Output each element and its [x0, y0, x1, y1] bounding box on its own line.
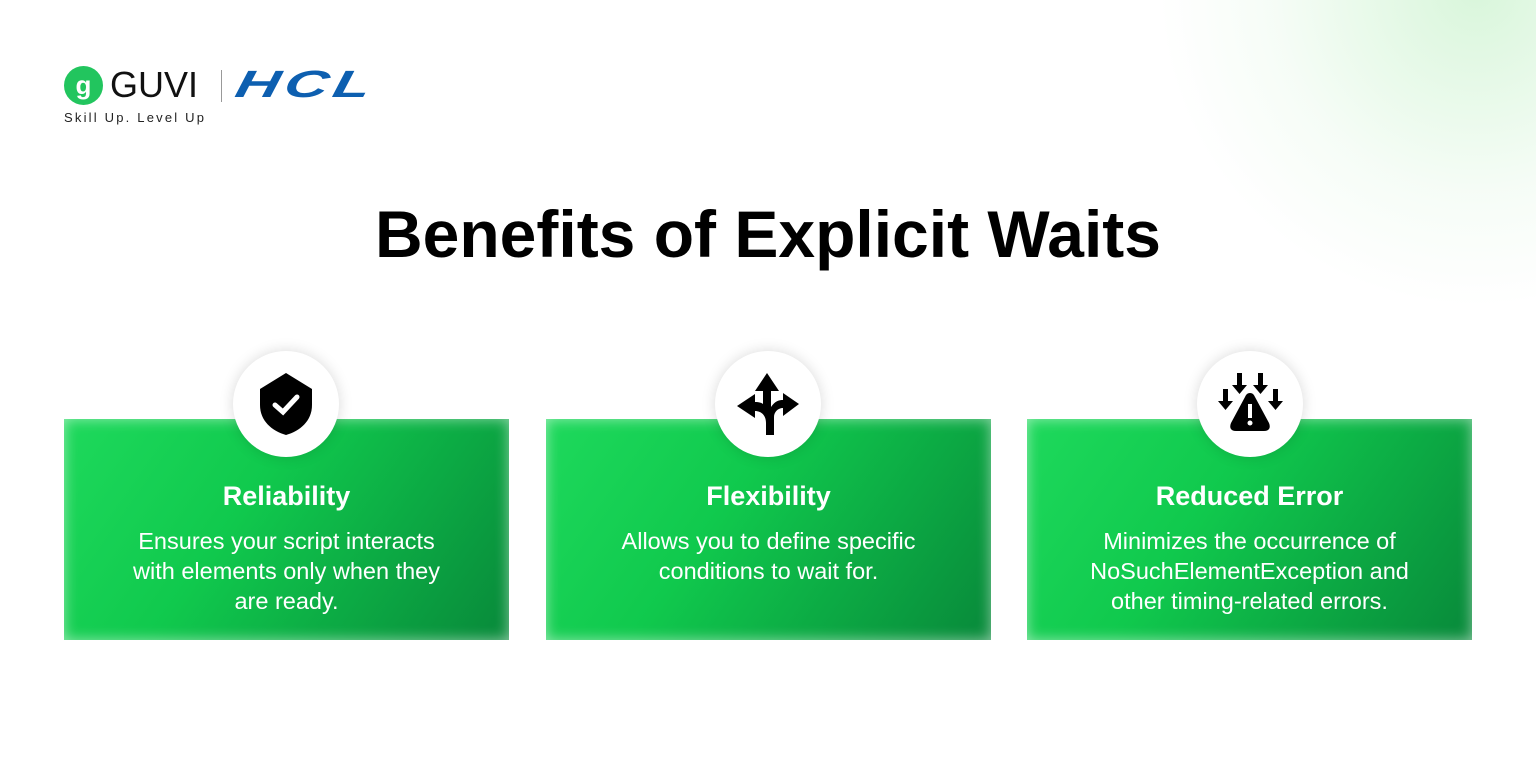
panel: reduced error [1027, 419, 1472, 640]
title: Benefits of Explicit Waits [375, 197, 1161, 271]
panel: reliability: Ensures your script interacts with elements only when they are ready. [133, 528, 440, 614]
panel: reduced error: Reduced Error [1156, 481, 1343, 511]
icon: shield [233, 351, 339, 457]
panel: flexibility: Flexibility [706, 481, 831, 511]
logo [64, 64, 380, 125]
icon: guvi circle [64, 66, 103, 105]
guvi wordmark: GUVI [110, 64, 198, 105]
icon: guvi circle: g [76, 70, 91, 100]
icon: warning arrows [1197, 351, 1303, 457]
panel: flexibility [546, 419, 991, 640]
panel: reliability: Reliability [223, 481, 350, 511]
icon: split arrows [715, 351, 821, 457]
tagline: Skill Up. Level Up [64, 110, 206, 125]
panel: flexibility: Allows you to define specific conditions to wait for. [622, 528, 915, 584]
panel: reduced error: Minimizes the occurrence of NoSuchElementException and other timing-related errors. [1090, 528, 1409, 614]
hcl wordmark: HCL [232, 64, 380, 106]
panel: reliability [64, 419, 509, 640]
